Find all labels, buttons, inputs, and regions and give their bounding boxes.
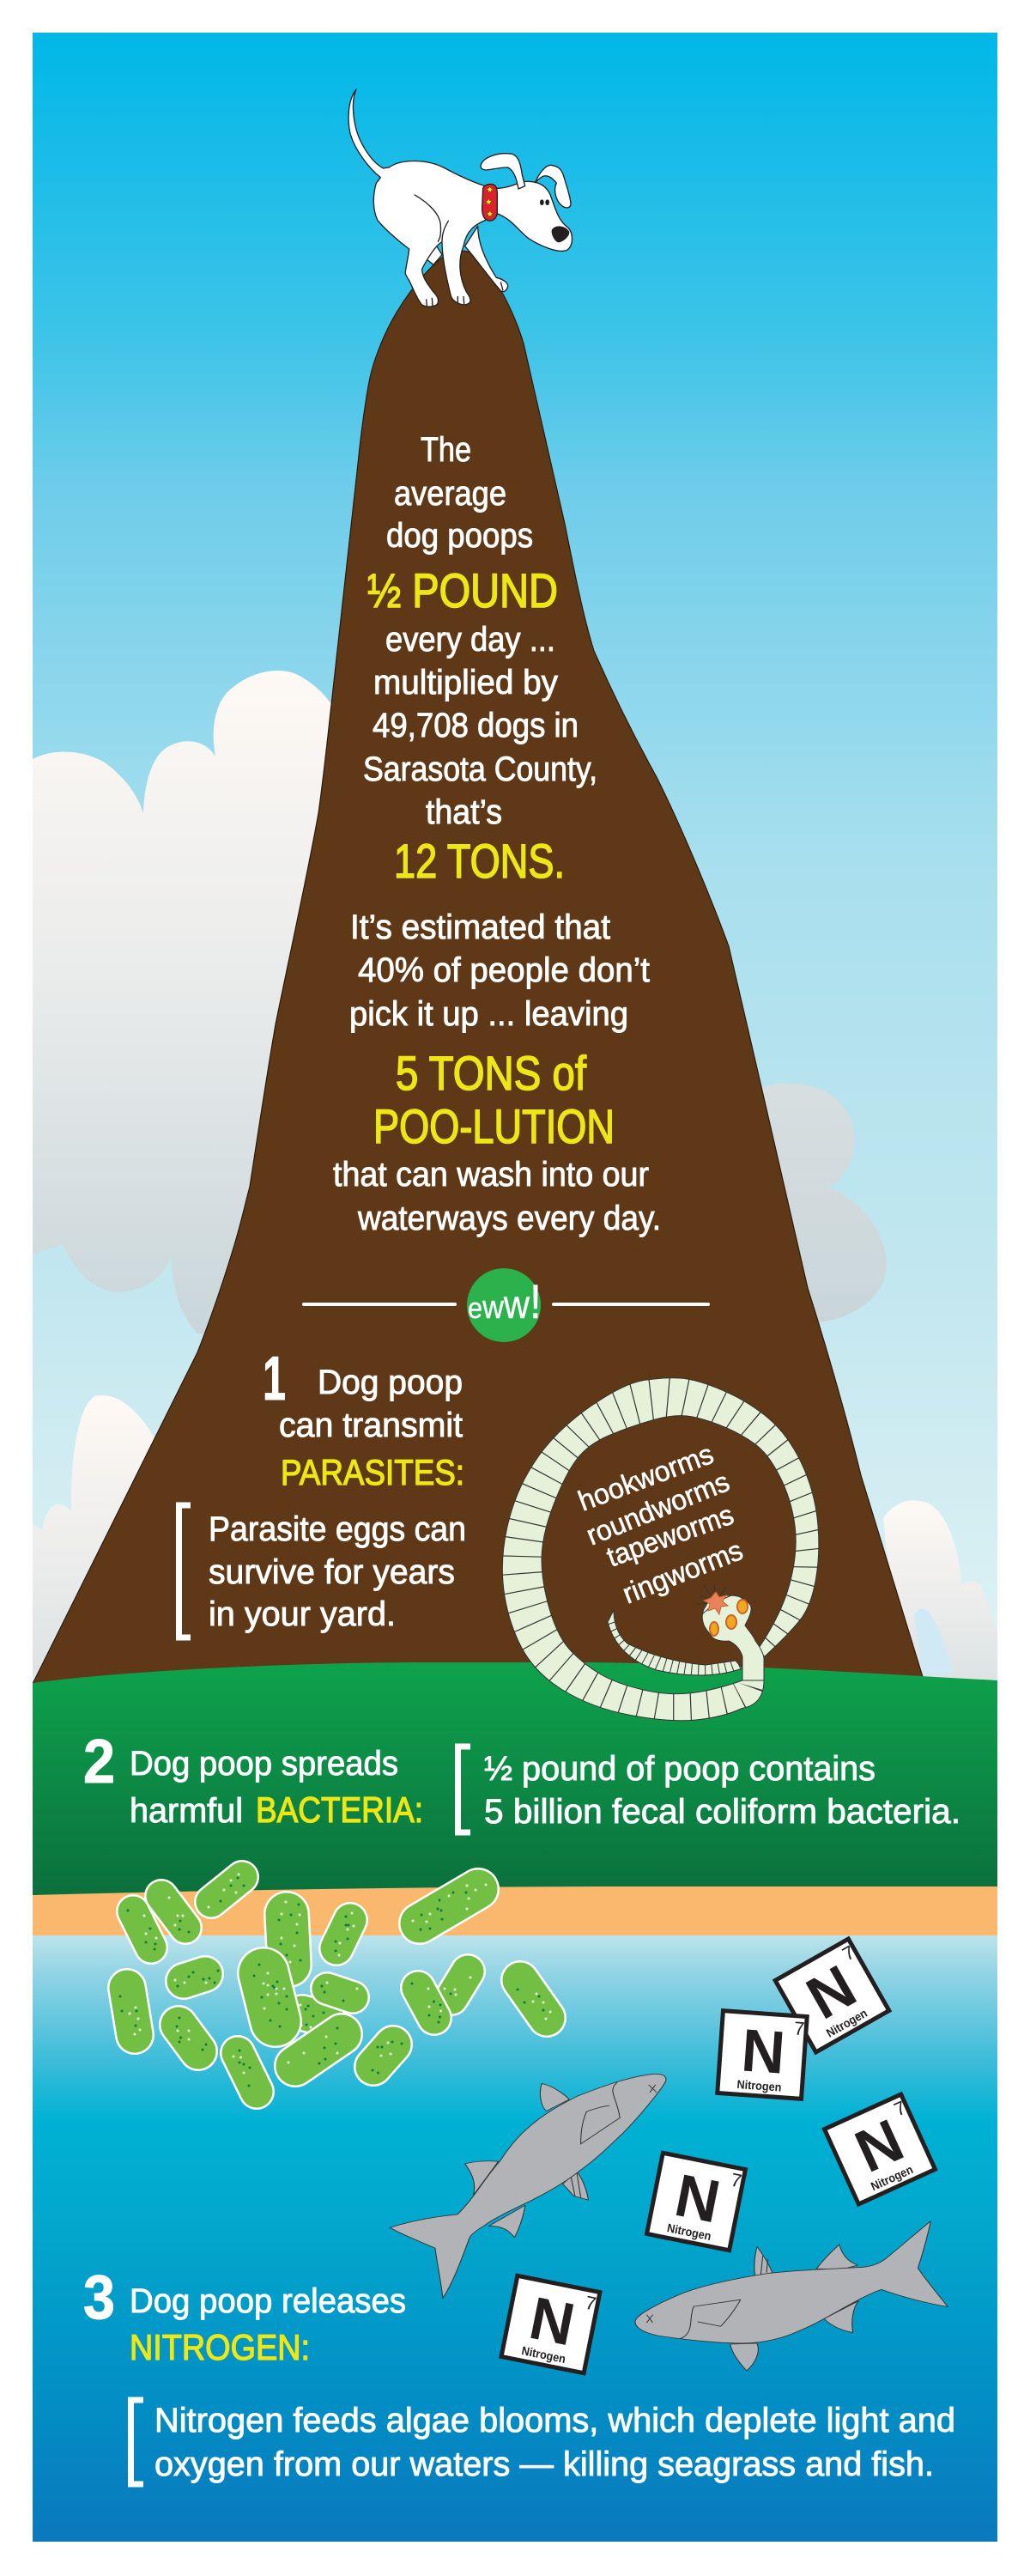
text block: parasite eggs: survive for years: [209, 1553, 455, 1591]
worm list text: [573, 1437, 747, 1610]
bacterium: [288, 2028, 342, 2066]
worm body ring: [502, 1378, 819, 1721]
worm list text: hookworms: [573, 1437, 718, 1517]
bacterium: [128, 1911, 156, 1949]
bacterium: [161, 1896, 189, 1932]
section 3: nitrogen: [83, 2263, 955, 2484]
bracket: [130, 2400, 143, 2484]
text block: daily poop statistics: that’s: [426, 793, 502, 831]
cloud: lower right: [883, 1500, 997, 1690]
icon: nitrogen tile 1: N: [796, 1953, 867, 2032]
nose: [552, 227, 569, 242]
number 2: 2: [83, 1728, 115, 1796]
sky: [33, 33, 997, 1690]
water: [33, 1935, 997, 2542]
worm neck and head: [702, 1595, 764, 1680]
bacterium: [413, 1885, 486, 1929]
bacterium: [336, 1913, 354, 1955]
text block: daily poop statistics: every day ...: [385, 621, 555, 659]
icon: lower fish: [635, 2221, 948, 2371]
left ear: [481, 154, 525, 189]
cloud: lower left: [33, 1395, 154, 1690]
text block: algae blooms: Nitrogen feeds algae blooms, which deplete light and: [154, 2402, 955, 2439]
icon: nitrogen tile 4: Nitrogen: [666, 2221, 712, 2243]
text block: daily poop statistics: The: [421, 431, 471, 469]
heading: parasites: Dog poop: [318, 1364, 463, 1401]
text block: daily poop statistics: Sarasota County,: [363, 750, 597, 788]
bracket: [458, 1747, 470, 1832]
divider with eww badge: eww!: [468, 1274, 542, 1328]
section 2: bacteria: [83, 1728, 960, 1832]
worm list text: tapeworms: [603, 1498, 737, 1573]
right ear: [535, 165, 571, 208]
bacteria cluster: [120, 1874, 550, 2092]
worm tail: [608, 1610, 742, 1675]
worm suckers: [710, 1600, 748, 1636]
text block: fecal coliform: ½ pound of poop contains: [484, 1750, 876, 1788]
bacterium: [518, 1980, 550, 2019]
text block: daily poop statistics: 49,708 dogs in: [373, 707, 579, 744]
heading: parasites: [279, 1364, 464, 1492]
worm list text: roundworms: [582, 1465, 734, 1551]
cloud: right grey: [755, 1084, 887, 1322]
icon: dog on top of the mountain: [348, 89, 572, 307]
text block: daily poop statistics: 40% of people don’t: [358, 951, 650, 989]
icon: nitrogen tile 2: 7: [793, 2018, 805, 2039]
eyes: [541, 200, 548, 204]
text block: daily poop statistics: [333, 431, 661, 1237]
far back leg: [427, 243, 442, 264]
icon: nitrogen tile 2: N: [739, 2016, 787, 2087]
worm spines burst: [697, 1585, 731, 1614]
heading: parasites: can transmit: [279, 1406, 463, 1444]
heading: bacteria: [130, 1745, 423, 1830]
icon: nitrogen tile 4: N: [670, 2161, 725, 2235]
icon: nitrogen tile 2: [718, 2011, 807, 2099]
number 3: 3: [83, 2263, 115, 2332]
icon: nitrogen tile 1: [775, 1939, 889, 2052]
heading: bacteria: Dog poop spreads: [130, 1745, 398, 1783]
dog body: [348, 89, 572, 307]
bacterium: [177, 2018, 206, 2051]
text block: daily poop statistics: dog poops: [386, 517, 533, 555]
section 1: parasites: [179, 1345, 466, 1637]
collar: [482, 184, 497, 221]
number 1: 1: [263, 1345, 286, 1413]
bacterium: [412, 1984, 441, 2022]
bacterium: [120, 1988, 140, 2035]
bacterium: [322, 1983, 357, 2001]
icon: upper fish: [390, 2074, 666, 2298]
icon: nitrogen tile 5: Nitrogen: [520, 2343, 567, 2366]
text block: daily poop statistics: multiplied by: [373, 664, 558, 702]
heading: nitrogen: Dog poop releases: [130, 2282, 406, 2320]
heading: nitrogen: [130, 2282, 406, 2367]
icon: nitrogen tile 4: 7: [729, 2169, 743, 2192]
bacterium: [441, 1971, 470, 1998]
text block: daily poop statistics: 5 TONS of: [396, 1046, 586, 1100]
heading: bacteria: BACTERIA:: [256, 1789, 423, 1830]
bracket: [179, 1505, 191, 1637]
divider with eww badge: [302, 1268, 710, 1342]
text block: fecal coliform: 5 billion fecal coliform bacteria.: [484, 1793, 960, 1831]
text block: algae blooms: [154, 2402, 955, 2483]
text block: parasite eggs: in your yard.: [209, 1595, 396, 1633]
haunch and shoulder lines: [415, 195, 503, 307]
heading: bacteria: harmful: [130, 1792, 243, 1830]
text block: daily poop statistics: 12 TONS.: [394, 834, 565, 888]
text block: daily poop statistics: average: [394, 475, 506, 513]
text block: parasite eggs: Parasite eggs can: [209, 1510, 466, 1548]
bacterium: [233, 2050, 257, 2092]
bacterium: [373, 2042, 402, 2073]
icon: nitrogen tile 3: 7: [891, 2097, 909, 2120]
heading: nitrogen: NITROGEN:: [130, 2327, 310, 2367]
icon: nitrogen tile 1: 7: [839, 1941, 858, 1965]
icon: nitrogen tile 3: [825, 2094, 935, 2204]
bacterium: [279, 1902, 300, 1965]
bacterium: [209, 1874, 244, 1907]
text block: daily poop statistics: POO-LUTION: [373, 1099, 615, 1153]
worm list text: ringworms: [618, 1534, 747, 1610]
bacterium: [254, 1965, 287, 2026]
cloud: pale blue sliver: [914, 1609, 953, 1674]
text block: daily poop statistics: waterways every day.: [357, 1200, 661, 1237]
hill of grass: [33, 1662, 997, 1898]
icon: nitrogen tile 3: Nitrogen: [869, 2162, 915, 2193]
text block: daily poop statistics: pick it up ... leaving: [349, 995, 628, 1033]
text block: daily poop statistics: ½ POUND: [367, 563, 558, 617]
text block: daily poop statistics: that can wash into our: [333, 1156, 649, 1194]
text block: daily poop statistics: It’s estimated that: [350, 908, 610, 946]
icon: coiled worm: [502, 1378, 819, 1721]
icon: nitrogen tile 5: N: [524, 2284, 580, 2358]
text block: algae blooms: oxygen from our waters — killing seagrass and fish.: [154, 2445, 934, 2483]
heading: parasites: PARASITES:: [281, 1452, 464, 1492]
icon: nitrogen tile 3: N: [845, 2106, 912, 2185]
text block: fecal coliform: [484, 1750, 960, 1831]
mountain of poop: [33, 251, 923, 1696]
icon: nitrogen tile 4: [647, 2153, 745, 2251]
icon: nitrogen tile 2: Nitrogen: [736, 2077, 782, 2094]
sand: [33, 1886, 997, 1937]
far front leg: [465, 226, 508, 292]
collar studs: [486, 186, 493, 216]
icon: nitrogen tile 5: 7: [584, 2292, 598, 2315]
bacterium: [175, 1971, 218, 1986]
cloud: large left: [33, 671, 335, 1340]
icon: nitrogen tile 1: Nitrogen: [824, 2006, 869, 2040]
bacterium: [300, 2005, 340, 2027]
icon: nitrogen tile 5: [501, 2275, 600, 2373]
text block: parasite eggs: [209, 1510, 466, 1633]
